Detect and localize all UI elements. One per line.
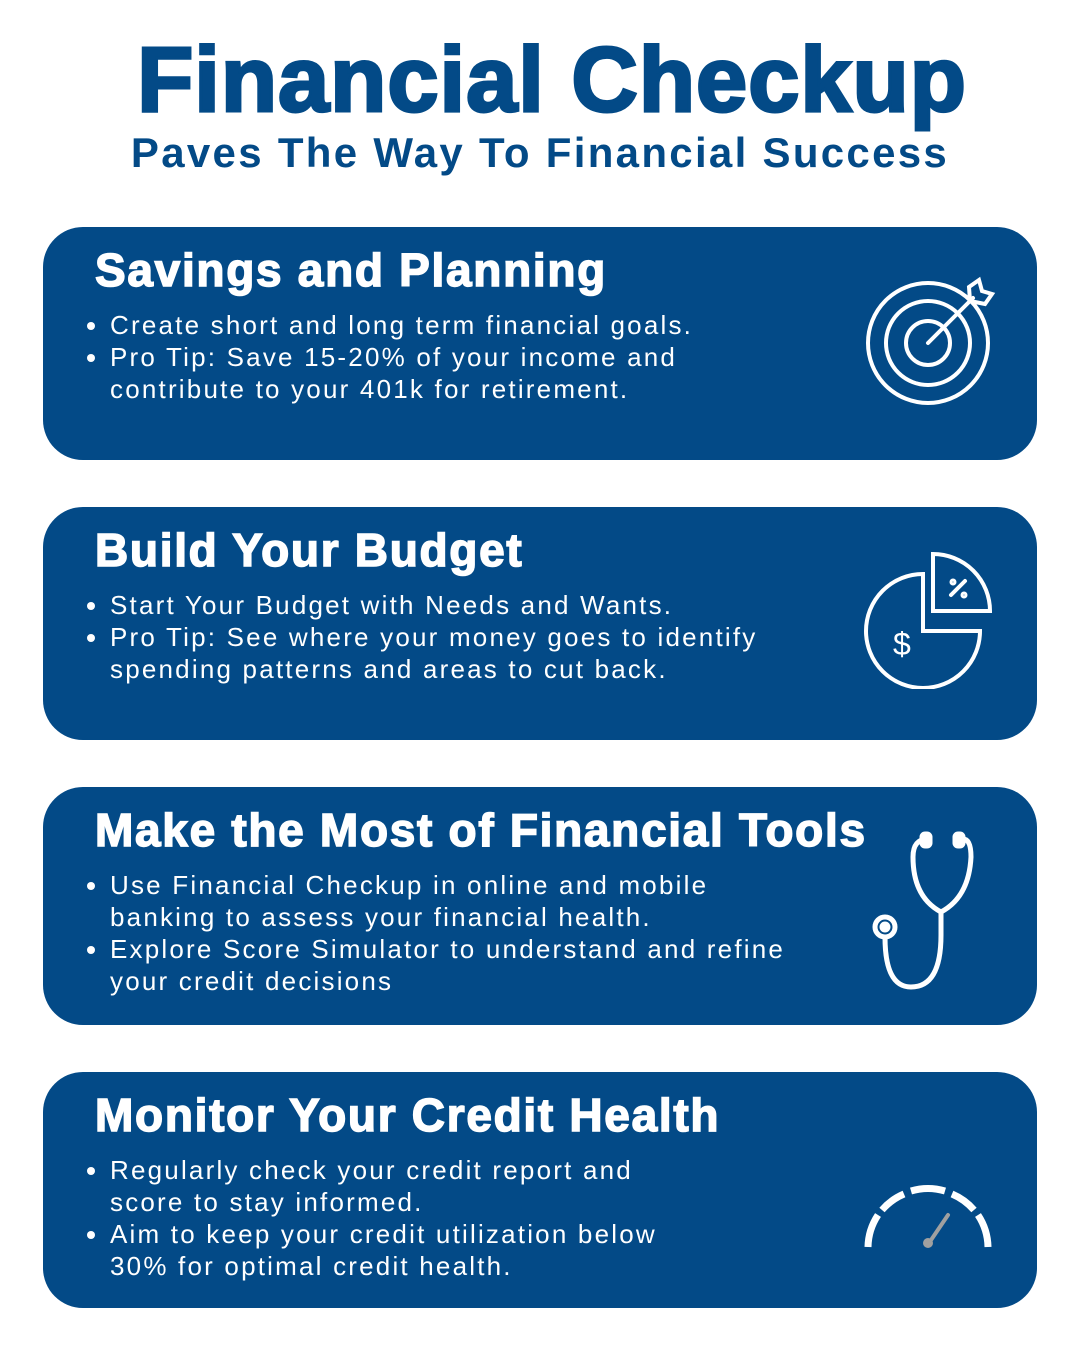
bullets [87, 870, 785, 996]
bullets: Pro Tip: Save 15-20% of your income and [110, 342, 677, 372]
subtitle: Paves The Way To Financial Success [131, 129, 949, 176]
icon: gauge [864, 1185, 992, 1248]
icon: target [866, 276, 996, 405]
icon: pie chart: $ [893, 626, 911, 662]
bullets: Pro Tip: See where your money goes to identify [110, 622, 758, 652]
bullets: banking to assess your financial health. [110, 902, 652, 932]
heading: Make the Most of Financial Tools [95, 804, 867, 856]
bullets: Create short and long term financial goals. [110, 310, 693, 340]
panel: build your budget [43, 507, 1037, 740]
bullets: Explore Score Simulator to understand and refine [110, 934, 785, 964]
panel: financial tools [43, 787, 1037, 1025]
bullets: score to stay informed. [110, 1187, 424, 1217]
bullets: spending patterns and areas to cut back. [110, 654, 668, 684]
panel: credit health [43, 1072, 1037, 1308]
bullets: Regularly check your credit report and [110, 1155, 633, 1185]
bullets: Use Financial Checkup in online and mobile [110, 870, 708, 900]
title: Financial Checkup [137, 29, 967, 131]
bullets: 30% for optimal credit health. [110, 1251, 513, 1281]
bullets: Start Your Budget with Needs and Wants. [110, 590, 673, 620]
heading: Savings and Planning [95, 244, 607, 296]
bullets [87, 310, 693, 404]
heading: Monitor Your Credit Health [95, 1089, 720, 1141]
bullets: Aim to keep your credit utilization below [110, 1219, 657, 1249]
heading: Build Your Budget [95, 524, 523, 576]
icon: stethoscope [872, 832, 974, 990]
icon: pie chart [864, 552, 992, 689]
panel: savings and planning [43, 227, 1037, 460]
bullets [87, 1155, 657, 1281]
bullets: contribute to your 401k for retirement. [110, 374, 629, 404]
bullets: your credit decisions [110, 966, 393, 996]
bullets [87, 590, 758, 684]
